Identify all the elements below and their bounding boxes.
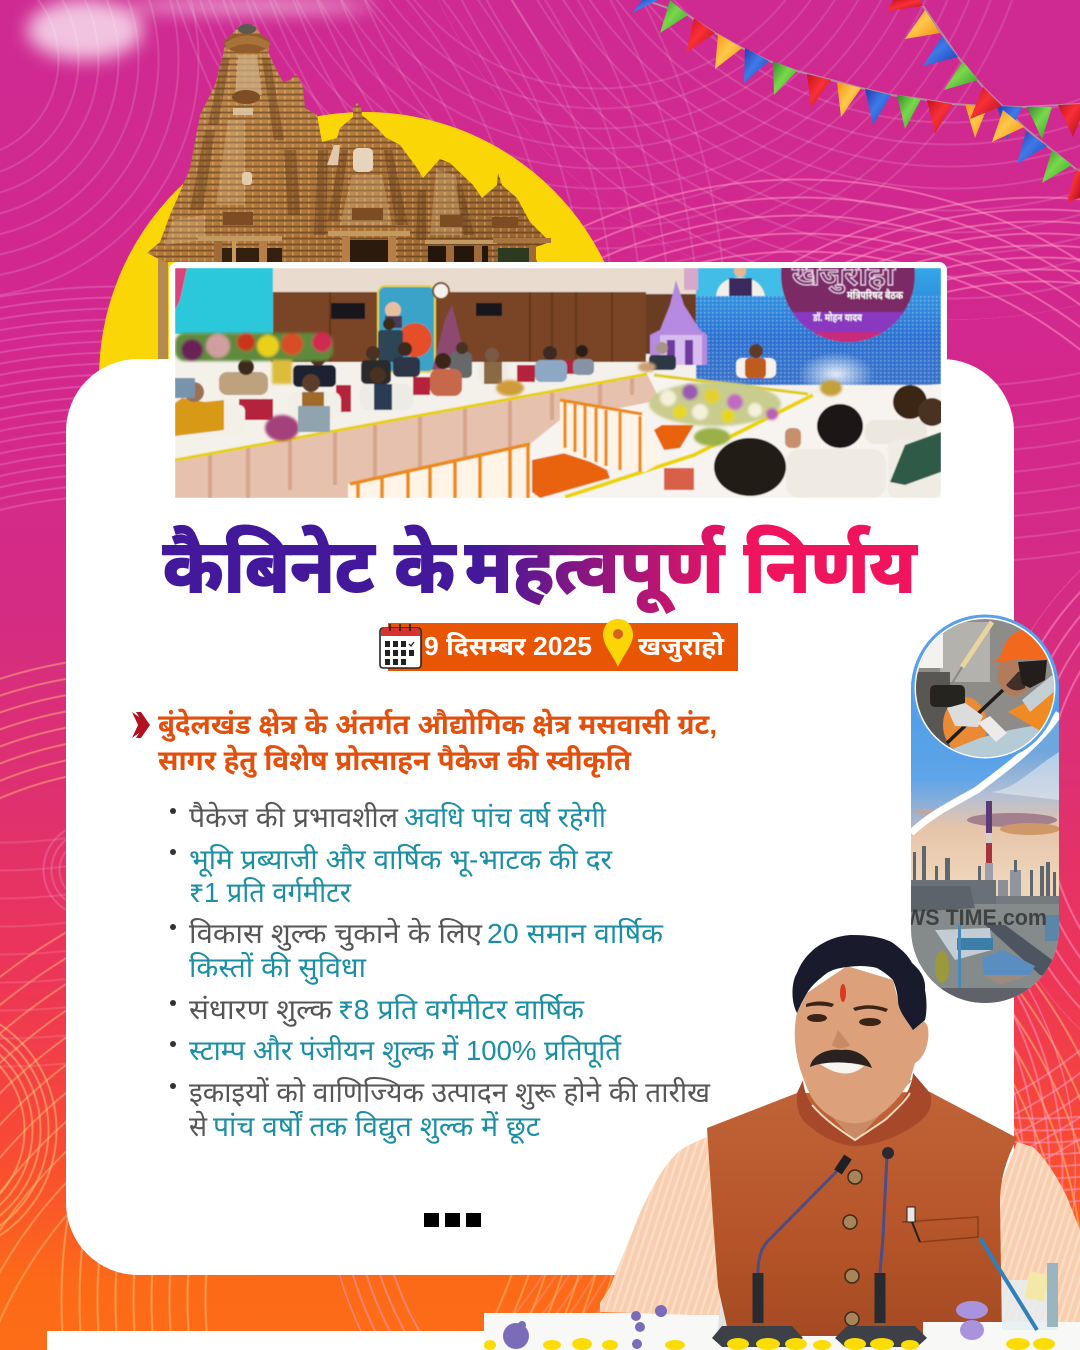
- bunting flags: [632, 0, 1080, 202]
- temple model: [650, 268, 707, 365]
- microphones: [758, 1147, 894, 1323]
- eyes and brows: [806, 1002, 888, 1026]
- icon: location pin: [603, 619, 633, 667]
- logo circle: मंत्रिपरिषद बैठक: [847, 289, 904, 302]
- bullet: maintenance fee: ₹8 प्रति वर्गमीटर वार्षिक: [338, 993, 584, 1025]
- more indicator squares: [424, 1213, 481, 1227]
- temple: [147, 24, 551, 363]
- bullet: electricity duty: पांच वर्षों तक विद्युत शुल्क में छूट: [213, 1110, 541, 1144]
- red chairs: [239, 360, 575, 420]
- kurta right sleeve: [995, 1142, 1080, 1340]
- pencil holder: [980, 1238, 1058, 1330]
- yellow sun circle: [99, 112, 631, 644]
- bullet: maintenance fee: संधारण शुल्क: [189, 994, 333, 1027]
- buttons: [843, 1170, 862, 1326]
- date and location bar: 9 दिसम्बर 2025: [424, 631, 592, 661]
- worker photo circle: [913, 616, 1057, 760]
- date and location bar: खजुराहो: [638, 631, 725, 662]
- meeting photo: [169, 262, 947, 498]
- bullet: land premium: ₹1 प्रति वर्गमीटर: [189, 876, 352, 908]
- watermark: WS TIME.com: [905, 905, 1047, 930]
- jacket: [707, 1092, 1017, 1340]
- tilak: [840, 984, 846, 1002]
- logo circle: डॉ. मोहन यादव: [812, 312, 863, 324]
- bullet: electricity duty: [170, 1076, 711, 1144]
- neck: [812, 1080, 912, 1142]
- bullet: stamp duty: स्टाम्प और पंजीयन शुल्क में 100% प्रतिपूर्ति: [189, 1034, 622, 1068]
- logo circle: खजुराहो: [792, 258, 896, 294]
- refinery towers: [986, 801, 992, 833]
- title: महत्वपूर्ण निर्णय: [465, 525, 918, 613]
- title: कैबिनेट के: [163, 525, 457, 608]
- bullet: package validity: [170, 801, 607, 833]
- bullet: land premium: [170, 843, 613, 908]
- standee banner: [378, 286, 435, 372]
- sky above swoosh: [911, 636, 1059, 828]
- yellow flowers: [484, 1338, 1055, 1350]
- stage backdrop: [696, 268, 941, 385]
- bullet: maintenance fee: [170, 993, 584, 1027]
- bullet: electricity duty: से: [189, 1110, 208, 1142]
- purple flowers: [503, 1301, 988, 1349]
- bullet: land premium: भूमि प्रब्याजी और वार्षिक भू-भाटक की दर: [189, 843, 613, 877]
- temple shading ribs: [190, 58, 474, 240]
- heading with arrow: सागर हेतु विशेष प्रोत्साहन पैकेज की स्वीकृति: [158, 743, 632, 778]
- logo circle: [780, 268, 916, 343]
- seated people: [175, 318, 776, 436]
- bullet: electricity duty: इकाइयों को वाणिज्यिक उत्पादन शुरू होने की तारीख: [189, 1076, 711, 1110]
- bullet list: [170, 801, 711, 1144]
- flower arrangements: [175, 332, 842, 446]
- table and carpet: [579, 376, 941, 494]
- jacket collar: [797, 1073, 931, 1146]
- bullet: development fee: 20 समान वार्षिक: [487, 917, 663, 949]
- icon: double chevron arrow: [132, 712, 150, 738]
- desk back panel: [484, 1313, 730, 1350]
- white swoosh: [911, 713, 1059, 833]
- bullet: package validity: पैकेज की प्रभावशील: [189, 801, 399, 833]
- bullet: development fee: [170, 917, 663, 985]
- title: [163, 525, 918, 613]
- white card: [66, 359, 1014, 1275]
- PM portrait on backdrop: [716, 265, 765, 296]
- bullet: package validity: अवधि पांच वर्ष रहेगी: [404, 801, 607, 833]
- heading with arrow: [132, 707, 717, 778]
- cloud: [27, 0, 375, 60]
- white strip bottom: [47, 1331, 487, 1350]
- bullet: development fee: विकास शुल्क चुकाने के लिए: [189, 917, 483, 951]
- heading with arrow: बुंदेलखंड क्षेत्र के अंतर्गत औद्योगिक क्षेत्र मसवासी ग्रंट,: [158, 707, 717, 742]
- date and location bar: [380, 619, 738, 671]
- portrait: chief minister: [600, 935, 1080, 1340]
- kurta left sleeve: [600, 1137, 735, 1315]
- face: [795, 966, 928, 1123]
- hair: [792, 935, 926, 1030]
- pocket and pen: [902, 1207, 978, 1242]
- bullet: development fee: किस्तों की सुविधा: [189, 951, 367, 985]
- icon: calendar: [380, 624, 421, 668]
- foreground officials: [714, 385, 946, 498]
- desk with flowers: [484, 1238, 1080, 1350]
- marigold garlands: [560, 400, 662, 472]
- industry capsule: [905, 615, 1060, 1004]
- orange floor: [532, 452, 610, 498]
- moustache and smile: [810, 1050, 872, 1068]
